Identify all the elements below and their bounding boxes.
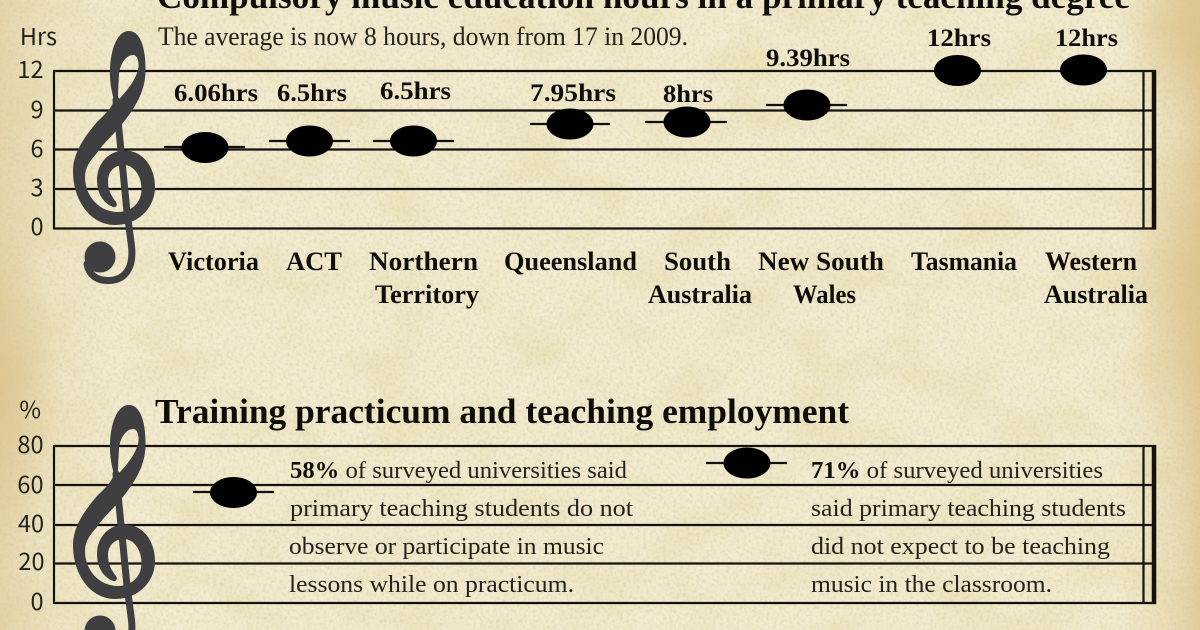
y axis labels: percent: % xyxy=(19,391,41,425)
value labels: 6.5hrs xyxy=(380,78,451,105)
y axis labels: percent xyxy=(17,391,44,617)
text block: 71 percent: did not expect to be teaching xyxy=(811,533,1110,560)
note: Victoria 6.06 xyxy=(164,132,245,163)
value labels: 12hrs xyxy=(1055,25,1118,52)
category labels: Australia xyxy=(1044,280,1148,309)
text block: 58 percent: primary teaching students do not xyxy=(290,495,633,522)
heading: training practicum: Training practicum and teaching employment xyxy=(155,392,849,431)
value labels: 7.95hrs xyxy=(530,80,616,107)
music staff xyxy=(54,70,1156,230)
y axis labels: hours: 12 xyxy=(17,51,44,85)
category labels: Tasmania xyxy=(911,247,1017,276)
value labels: 6.06hrs xyxy=(174,80,258,107)
music staff xyxy=(54,445,1156,604)
value labels xyxy=(174,25,1118,108)
y axis labels: percent: 20 xyxy=(18,543,44,577)
note: South Australia 8 xyxy=(645,106,727,138)
y axis labels: hours xyxy=(17,18,57,242)
category labels: Western xyxy=(1045,247,1138,276)
category labels: New South xyxy=(758,247,885,276)
y axis labels: percent: 60 xyxy=(17,466,44,500)
note: Western Australia 12 xyxy=(1060,54,1107,86)
section 1: compulsory hours chart xyxy=(17,0,1156,309)
note: 71 percent xyxy=(706,448,787,478)
category labels: Queensland xyxy=(504,247,638,276)
section 2: practicum and employment xyxy=(17,391,1156,630)
note: Tasmania 12 xyxy=(934,55,981,86)
y axis labels: hours: 3 xyxy=(30,169,44,203)
y axis labels: hours: 6 xyxy=(30,130,44,164)
value labels: 12hrs xyxy=(927,25,991,52)
note: 58 percent xyxy=(193,477,274,508)
value labels: 8hrs xyxy=(663,81,713,108)
text block: 71 percent: 71% of surveyed universities xyxy=(811,457,1103,484)
text block: 58 percent: observe or participate in music xyxy=(289,533,604,560)
text block: 58 percent: lessons while on practicum. xyxy=(289,571,574,598)
category labels: Victoria xyxy=(168,247,259,276)
icon: treble clef xyxy=(73,31,155,281)
y axis labels: hours: 0 xyxy=(30,208,44,242)
y axis labels: hours: Hrs xyxy=(20,18,57,52)
category labels: Northern xyxy=(369,247,479,276)
subheading: average: The average is now 8 hours, down from 17 in 2009. xyxy=(158,22,688,51)
note: Northern Territory 6.5 xyxy=(373,126,454,156)
y axis labels: hours: 9 xyxy=(30,91,44,125)
note: New South Wales 9.39 xyxy=(766,90,847,120)
category labels: Territory xyxy=(375,280,479,309)
category labels: ACT xyxy=(286,247,342,276)
category labels: South xyxy=(664,247,732,276)
text block: 71 percent: music in the classroom. xyxy=(811,571,1052,598)
y axis labels: percent: 80 xyxy=(17,426,44,460)
note: ACT 6.5 xyxy=(269,126,350,156)
value labels: 9.39hrs xyxy=(766,45,850,72)
text block: 58 percent: 58% of surveyed universities said xyxy=(290,457,627,484)
category labels: Australia xyxy=(648,280,752,309)
value labels: 6.5hrs xyxy=(277,80,347,107)
text block: 58 percent xyxy=(289,457,633,598)
category labels: Wales xyxy=(793,280,856,309)
icon: treble clef xyxy=(73,405,155,630)
text block: 71 percent: said primary teaching students xyxy=(811,495,1126,522)
y axis labels: percent: 0 xyxy=(30,583,44,617)
category labels xyxy=(168,247,1148,309)
y axis labels: percent: 40 xyxy=(18,505,44,539)
note: Queensland 7.95 xyxy=(530,108,610,140)
text block: 71 percent xyxy=(811,457,1126,598)
